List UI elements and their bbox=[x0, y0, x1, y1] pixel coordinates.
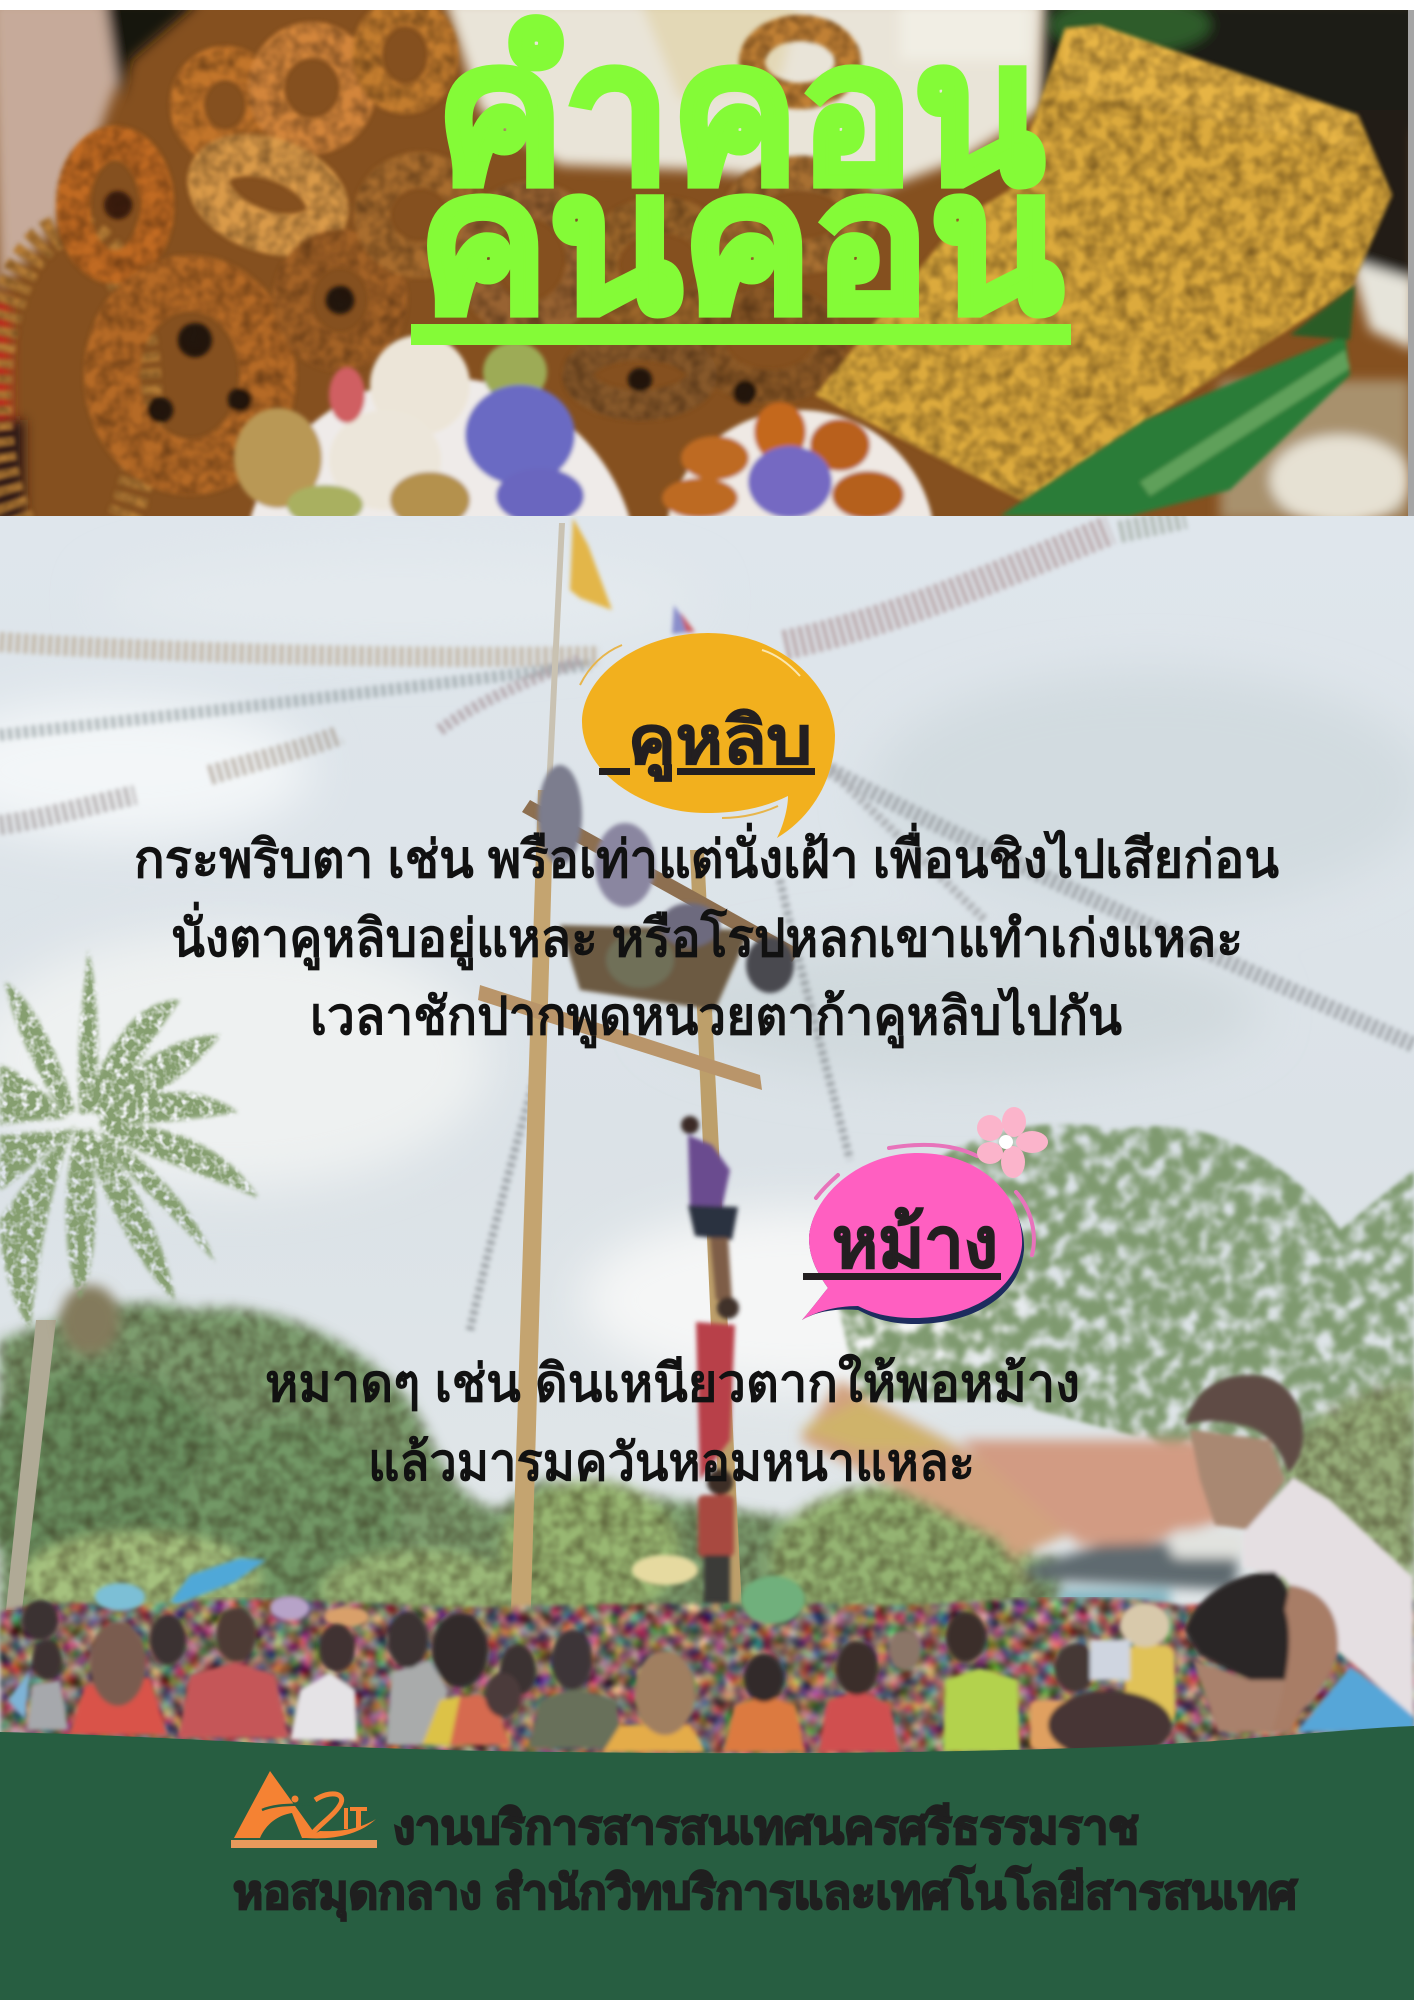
photo: plate of orange sweets bbox=[660, 400, 936, 516]
panel: footer band bbox=[0, 1726, 1414, 2000]
white shirt of the boy bbox=[1243, 1477, 1414, 1717]
icon: pink flower bbox=[977, 1107, 1048, 1178]
text block: definition of หม้าง bbox=[265, 1353, 1080, 1492]
text block: definition of หม้าง: แล้วมารมควันหอมหนาแหละ bbox=[368, 1434, 975, 1492]
callout heading: หม้าง: หม้าง bbox=[832, 1204, 998, 1282]
adult face bbox=[1193, 1660, 1285, 1732]
photo: right hillside foliage bbox=[1250, 1380, 1414, 1640]
photo: background trees bbox=[0, 1303, 1060, 1660]
boy arm bbox=[1272, 1585, 1338, 1732]
photo: umbrellas bbox=[95, 1555, 805, 1627]
blue shirt of the adult bbox=[1297, 1667, 1414, 1732]
title line 1: คำคอน bbox=[436, 3, 1044, 224]
title: main heading bbox=[411, 3, 1071, 353]
adult head hair bbox=[1185, 1572, 1297, 1680]
title underline bbox=[411, 324, 1071, 345]
text block: definition of คูหลิบ bbox=[134, 823, 1279, 1049]
photo: banana leaf bbox=[1000, 285, 1355, 516]
photo: temple roof bbox=[794, 1375, 1246, 1606]
photo: right tree canopy bbox=[835, 1124, 1414, 1560]
photo: climbers bbox=[681, 1116, 739, 1605]
photo: clouds bbox=[0, 681, 1414, 1398]
photo: greased climbing poles and scaffold bbox=[478, 523, 800, 1670]
boy face and neck bbox=[1190, 1430, 1285, 1530]
photo: golden crepe bbox=[815, 25, 1392, 502]
photo: shredded white rice snack bbox=[445, 0, 1045, 190]
footer line 1: งานบริการสารสนเทศนครศรีธรรมราช bbox=[393, 1801, 1139, 1853]
photo: flags on mast bbox=[570, 518, 695, 634]
callout: orange speech bubble bbox=[580, 633, 835, 838]
callout: pink speech bubble bbox=[802, 1107, 1048, 1324]
panel: food photo header bbox=[0, 10, 1414, 516]
panel: festival photo background bbox=[0, 516, 1414, 1759]
title line 2: คนคอน bbox=[418, 132, 1063, 353]
callout heading: คูหลิบ: คูหลิบ bbox=[628, 703, 812, 782]
text block: definition of หม้าง: หมาดๆ เช่น ดินเหนียวตากให้พอหม้าง bbox=[265, 1353, 1080, 1413]
photo: tablecloth and dark corner bbox=[0, 0, 1414, 525]
text block: definition of คูหลิบ: กระพริบตา เช่น พรือเท่าแต่นั่งเฝ้า เพื่อนชิงไปเสียก่อน bbox=[134, 823, 1279, 889]
photo: plate of coloured sweets bbox=[232, 332, 632, 516]
footer line 2: หอสมุดกลาง สำนักวิทบริการและเทศโนโลยีสารสนเทศ bbox=[233, 1865, 1298, 1921]
photo: palm tree bbox=[0, 950, 258, 1610]
photo: bunting flags bbox=[0, 518, 1414, 1330]
photo: distant crowd bbox=[0, 1597, 1414, 1756]
text block: definition of คูหลิบ: เวลาชักปากพูดหนวยตาก้าคูหลิบไปกัน bbox=[310, 986, 1122, 1049]
photo: foreground crowd bbox=[8, 1600, 1175, 1759]
boy hair bbox=[1185, 1375, 1303, 1473]
photo: boy on shoulders bbox=[1185, 1375, 1414, 1732]
text block: definition of คูหลิบ: นั่งตาคูหลิบอยู่แหละ หรือโรปหลกเขาแทำเก่งแหละ bbox=[171, 902, 1243, 971]
photo: fried dough rings bbox=[0, 11, 1392, 570]
logo: orange AZIT mark bbox=[231, 1771, 377, 1848]
